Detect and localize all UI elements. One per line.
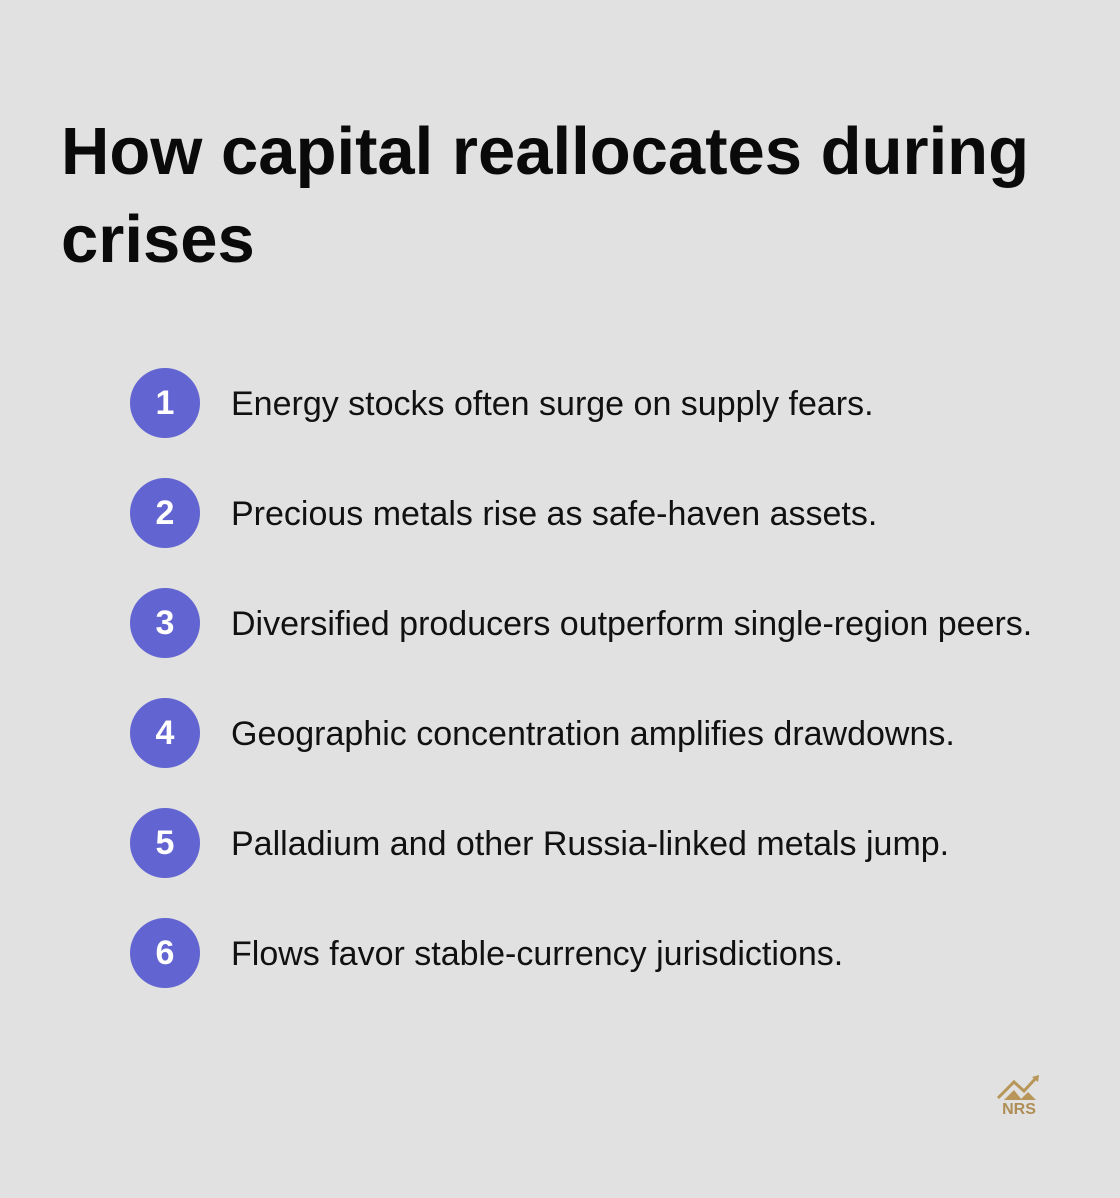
list item 2 — [130, 478, 877, 548]
list item 6: 6 — [156, 934, 174, 972]
title: crises — [61, 202, 255, 277]
list item 5: Palladium and other Russia-linked metals jump. — [231, 825, 949, 863]
list item 2: Precious metals rise as safe-haven assets. — [231, 495, 877, 533]
list item 4 — [130, 698, 955, 768]
list item 3: Diversified producers outperform single-region peers. — [231, 605, 1032, 643]
list item 6 — [130, 918, 843, 988]
list item 3 — [130, 588, 1032, 658]
list item 1: Energy stocks often surge on supply fears. — [231, 385, 874, 423]
list item 1: 1 — [156, 384, 174, 422]
list item 3: 3 — [156, 604, 174, 642]
list item 4: Geographic concentration amplifies drawdowns. — [231, 715, 955, 753]
list item 6: Flows favor stable-currency jurisdictions. — [231, 935, 843, 973]
list item 5 — [130, 808, 949, 878]
list item 1 — [130, 368, 874, 438]
title — [61, 114, 1029, 277]
logo: NRS — [997, 1075, 1039, 1116]
list item 5: 5 — [156, 824, 174, 862]
list item 4: 4 — [156, 714, 174, 752]
list item 2: 2 — [156, 494, 174, 532]
title: How capital reallocates during — [61, 114, 1029, 189]
